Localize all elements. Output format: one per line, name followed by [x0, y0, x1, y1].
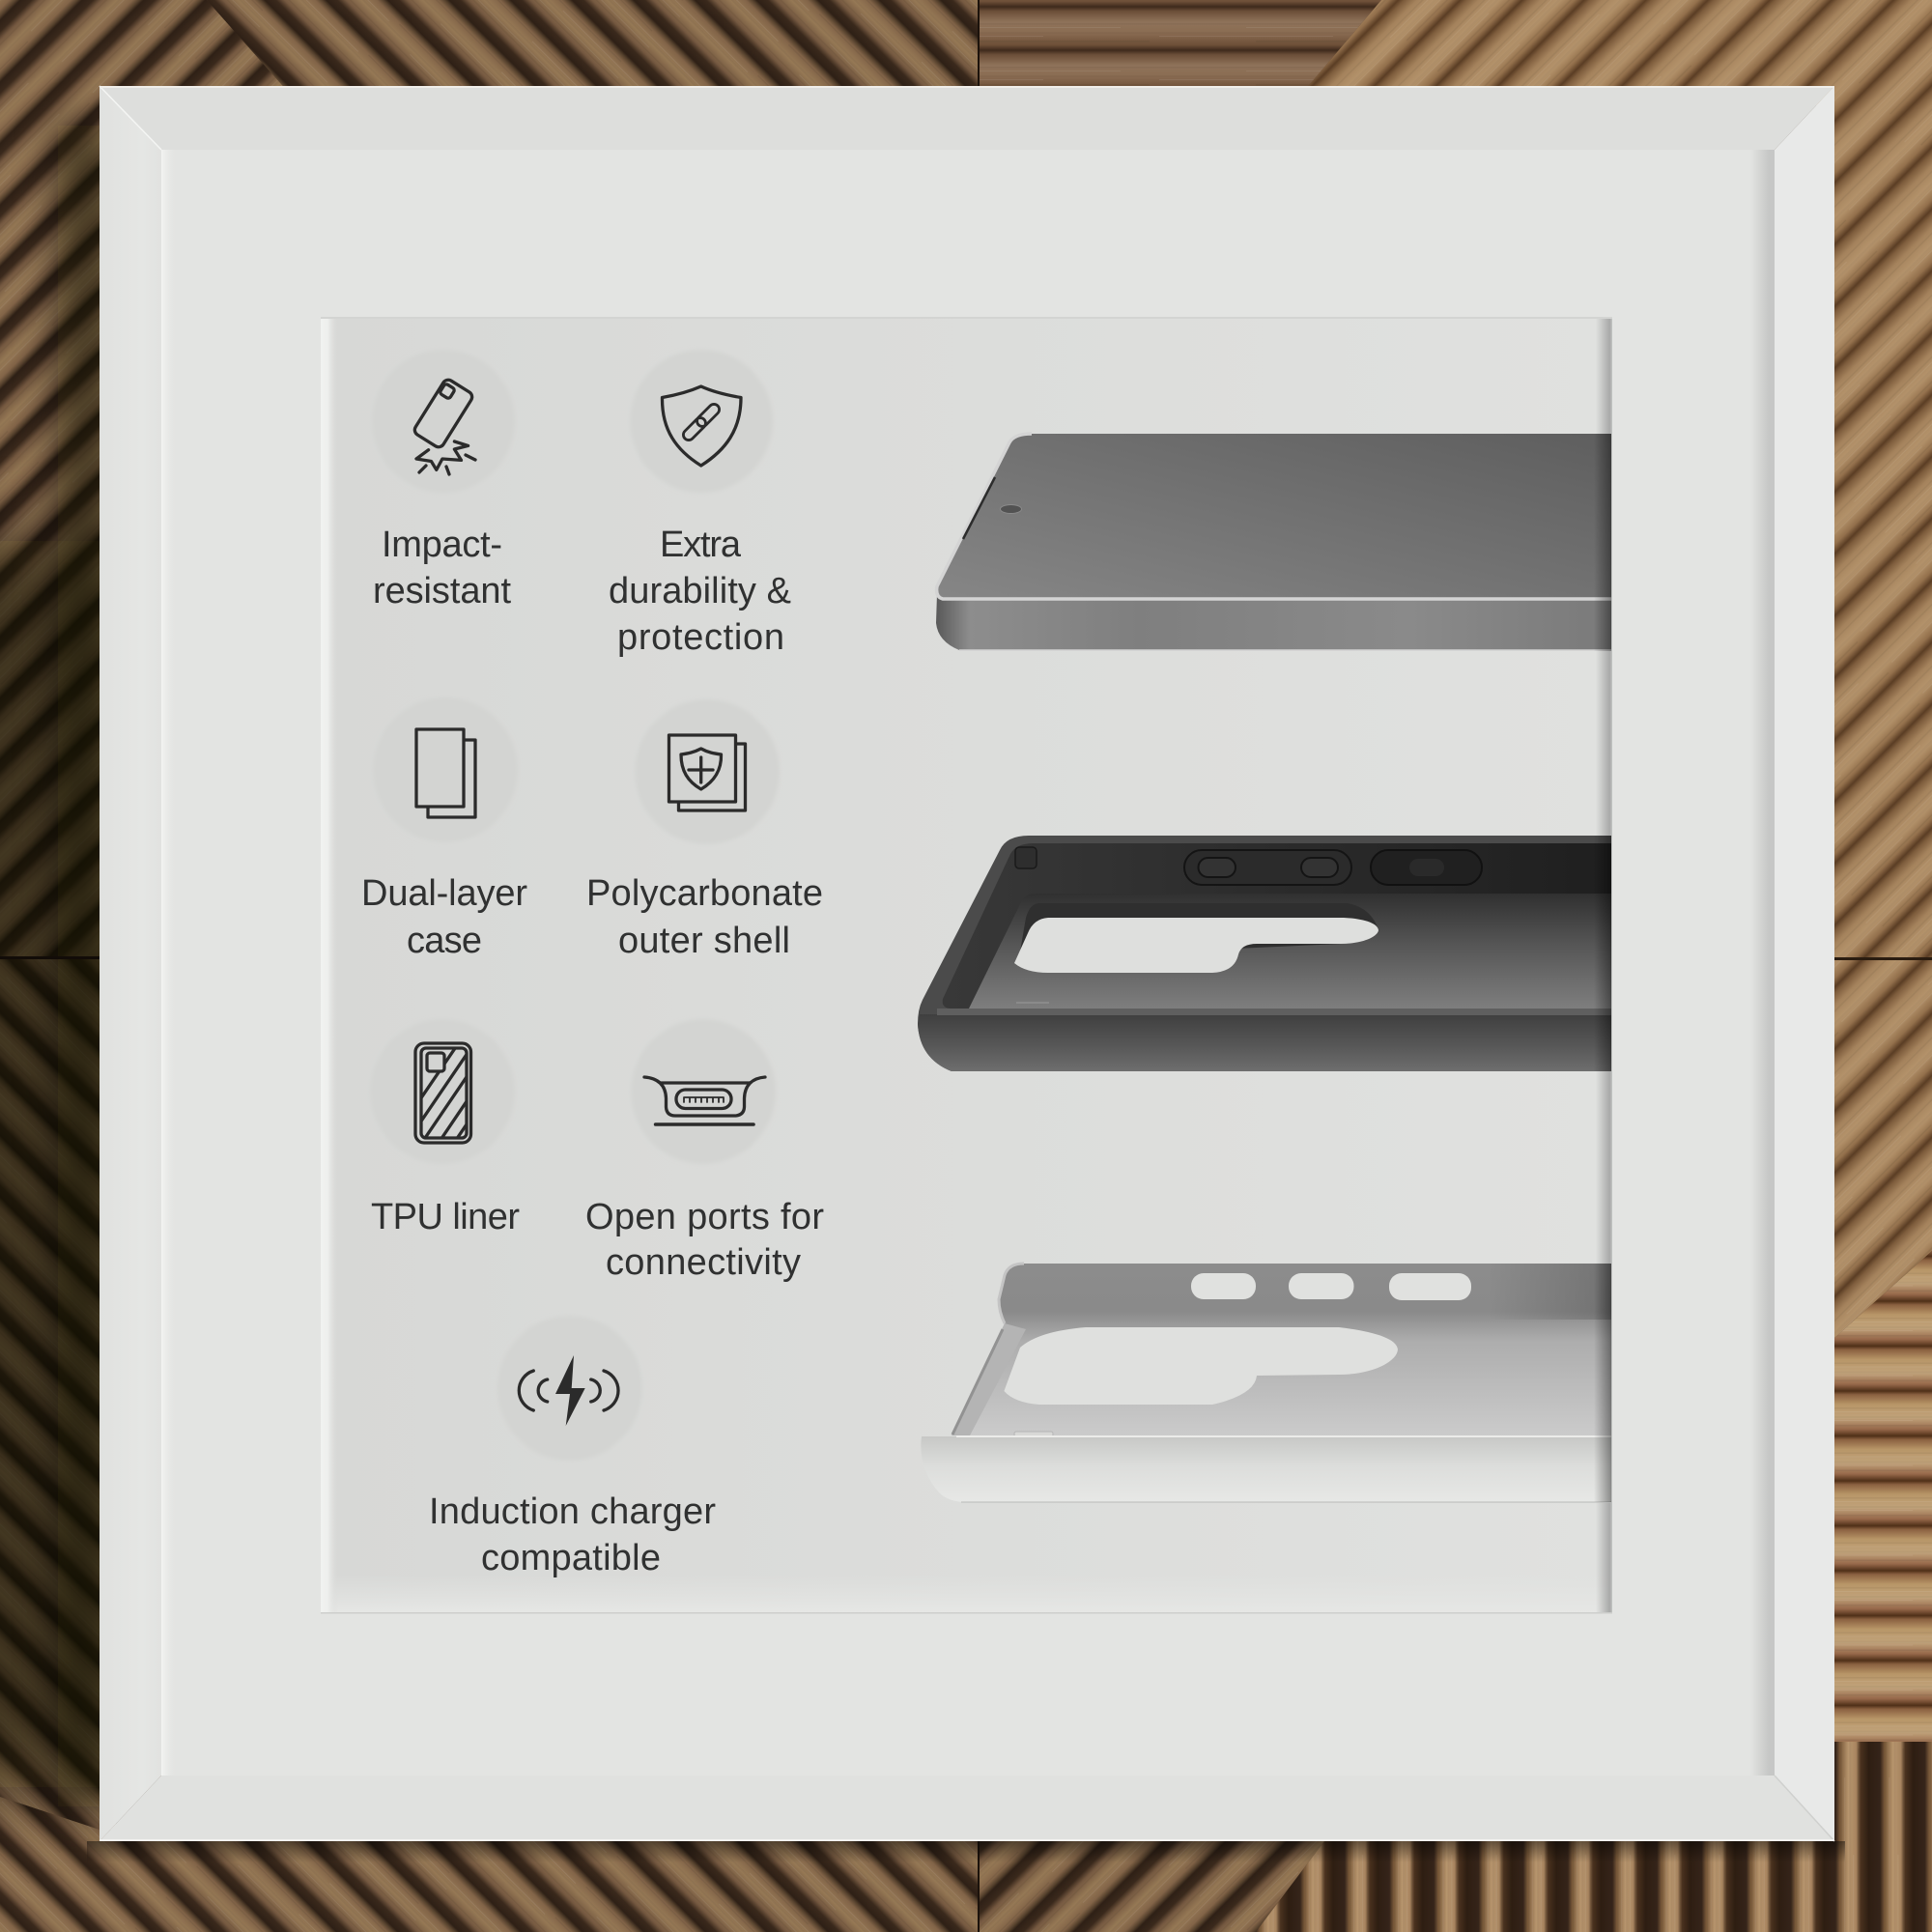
camera cutout	[1014, 918, 1378, 973]
label: Induction charger compatible: Induction charger	[429, 1492, 716, 1532]
front camera	[1001, 504, 1022, 514]
wood panel: bottom-right vertical slats	[1256, 1742, 1932, 1932]
power button recess	[1371, 850, 1482, 885]
label: Dual-layer case	[361, 873, 527, 961]
icon: two stacked layers	[416, 729, 475, 817]
feature: open ports	[585, 1019, 824, 1283]
feature: induction charger	[429, 1316, 716, 1578]
frame: right moulding	[1775, 86, 1834, 1841]
label: Impact-resistant	[373, 525, 511, 611]
phone screen	[937, 434, 1611, 599]
exploded view: phone	[936, 434, 1611, 651]
wood panel: top diagonal slats	[207, 0, 978, 97]
label: Induction charger compatible: compatible	[481, 1538, 661, 1578]
label: Open ports for connectivity: connectivity	[606, 1242, 801, 1283]
label: Open ports for connectivity: Open ports for	[585, 1197, 824, 1237]
icon: USB-C port	[644, 1077, 765, 1124]
label: Extra durability & protection: durability &	[609, 571, 791, 611]
label: Dual-layer case: case	[407, 921, 482, 961]
label: Extra durability & protection: Extra	[660, 525, 742, 565]
phone side band	[936, 594, 1611, 650]
label: Induction charger compatible	[429, 1492, 716, 1578]
icon background circle	[373, 697, 518, 842]
label: Polycarbonate outer shell	[586, 873, 823, 961]
feature: TPU liner	[371, 1041, 520, 1229]
liner cavity wall	[943, 843, 1611, 1009]
icon background circle	[372, 350, 515, 493]
exploded view: white outer shell	[921, 1264, 1611, 1502]
wood panel: top centre horizontal slats	[978, 0, 1381, 97]
mat window panel	[321, 317, 1612, 1613]
frame: top moulding	[99, 86, 1834, 150]
label: Extra durability & protection	[609, 525, 791, 658]
label: Impact-resistant: resistant	[373, 571, 511, 611]
wood panel: left lower diagonal slats	[0, 958, 116, 1835]
icon background circle	[370, 1019, 515, 1164]
icon: falling phone with impact burst	[412, 378, 475, 474]
icon background circle	[630, 350, 773, 493]
camera cutout rim	[1020, 903, 1378, 956]
label: Polycarbonate outer shell: outer shell	[618, 921, 790, 961]
icon background circle	[631, 1019, 776, 1164]
feature: polycarbonate outer shell	[586, 699, 823, 961]
label: Dual-layer case: Dual-layer	[361, 873, 527, 914]
port holes	[1191, 1273, 1256, 1299]
icon background circle	[635, 699, 780, 844]
icon: wireless charging bolt	[519, 1355, 618, 1426]
frame: bottom moulding	[99, 1776, 1834, 1841]
feature: extra durability	[609, 350, 791, 658]
camera cutout	[1004, 1327, 1398, 1405]
liner cavity floor	[969, 894, 1611, 1009]
label: Open ports for connectivity	[585, 1197, 824, 1283]
liner bottom band	[918, 1014, 1611, 1071]
label: TPU liner: TPU liner	[371, 1197, 520, 1237]
icon: hatched phone liner	[413, 1041, 473, 1145]
wood panel: right diagonal slats	[1299, 0, 1932, 1338]
front band	[921, 1436, 1611, 1502]
icon: shield with chain link	[662, 386, 741, 466]
wood panel: right horizontal slats	[1826, 1251, 1932, 1742]
liner body	[918, 836, 1611, 1071]
icon background circle	[497, 1316, 642, 1461]
exploded view: dark inner liner	[918, 836, 1611, 1071]
feature: impact-resistant	[372, 350, 515, 611]
feature: dual-layer case	[361, 697, 527, 961]
frame: left moulding	[99, 86, 161, 1841]
wood panel: bottom-left diagonal slats	[0, 1797, 978, 1932]
label: Extra durability & protection: protection	[617, 617, 784, 658]
icon: layered sheet with shield	[668, 735, 746, 810]
label: Impact-resistant: Impact-	[382, 525, 502, 565]
wood panel: top-left diagonal slats	[0, 0, 290, 958]
wood panel: bottom centre diagonal slats	[978, 1830, 1333, 1932]
shell wall and floor	[952, 1264, 1611, 1435]
label: Polycarbonate outer shell: Polycarbonate	[586, 873, 823, 914]
volume button recess	[1184, 850, 1351, 885]
